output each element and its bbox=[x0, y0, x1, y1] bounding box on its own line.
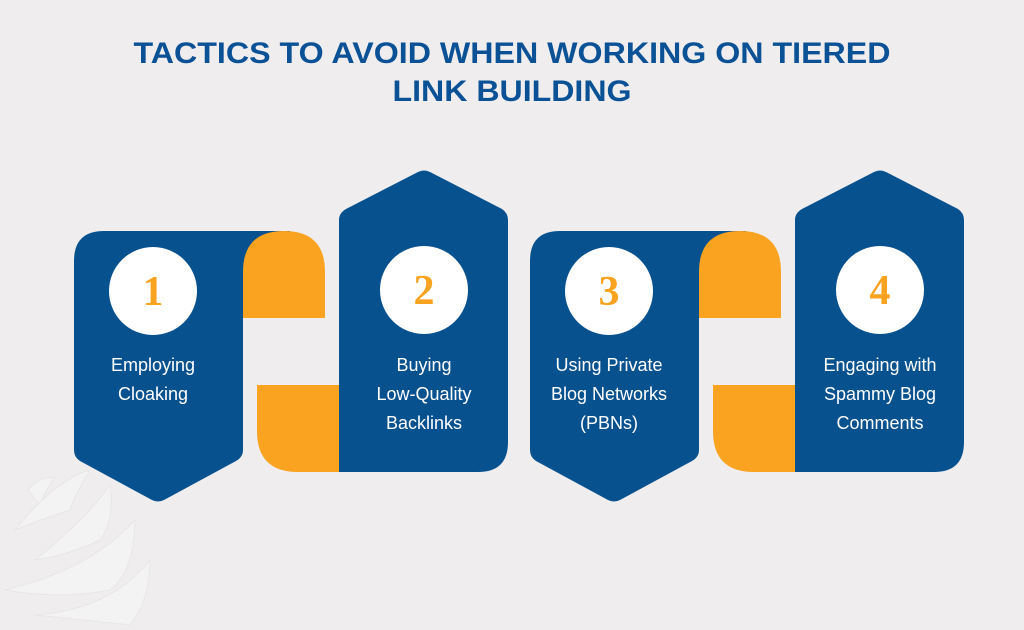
panel: step 3 bbox=[530, 231, 781, 502]
decorative globe bbox=[5, 470, 150, 625]
panel: step 3: (PBNs) bbox=[580, 413, 638, 433]
panel: step 2: 2 bbox=[414, 268, 434, 314]
panel: step 1: 1 bbox=[142, 269, 164, 315]
panel: step 1: Cloaking bbox=[118, 384, 188, 404]
panel: step 2: Backlinks bbox=[386, 413, 462, 433]
label 1: Employing bbox=[111, 355, 195, 375]
orange connector upper 2 bbox=[699, 231, 781, 318]
panel: step 4: Comments bbox=[836, 413, 924, 433]
panel: step 3: Blog Networks bbox=[551, 384, 667, 404]
title: LINK BUILDING bbox=[392, 75, 632, 108]
orange connector lower 1 bbox=[257, 385, 339, 472]
panel: step 3: 3 bbox=[598, 269, 620, 315]
panel: step 4: 4 bbox=[870, 268, 890, 314]
label 3: Using Private bbox=[555, 355, 663, 375]
circle number 1 bbox=[109, 247, 197, 335]
panel: step 2 bbox=[257, 170, 508, 472]
circle number 2 bbox=[380, 246, 468, 334]
title: TACTICS TO AVOID WHEN WORKING ON TIERED bbox=[134, 37, 891, 70]
label 4: Engaging with bbox=[823, 355, 937, 375]
circle number 4 bbox=[836, 246, 924, 334]
panel: step 1 bbox=[74, 231, 325, 502]
panel: step 4 bbox=[713, 170, 964, 472]
orange connector upper 1 bbox=[243, 231, 325, 318]
orange connector lower 2 bbox=[713, 385, 795, 472]
panel: step 4: Spammy Blog bbox=[824, 384, 936, 404]
panel: step 2: Low-Quality bbox=[376, 384, 472, 404]
circle number 3 bbox=[565, 247, 653, 335]
title bbox=[134, 37, 891, 108]
label 2: Buying bbox=[396, 355, 452, 375]
